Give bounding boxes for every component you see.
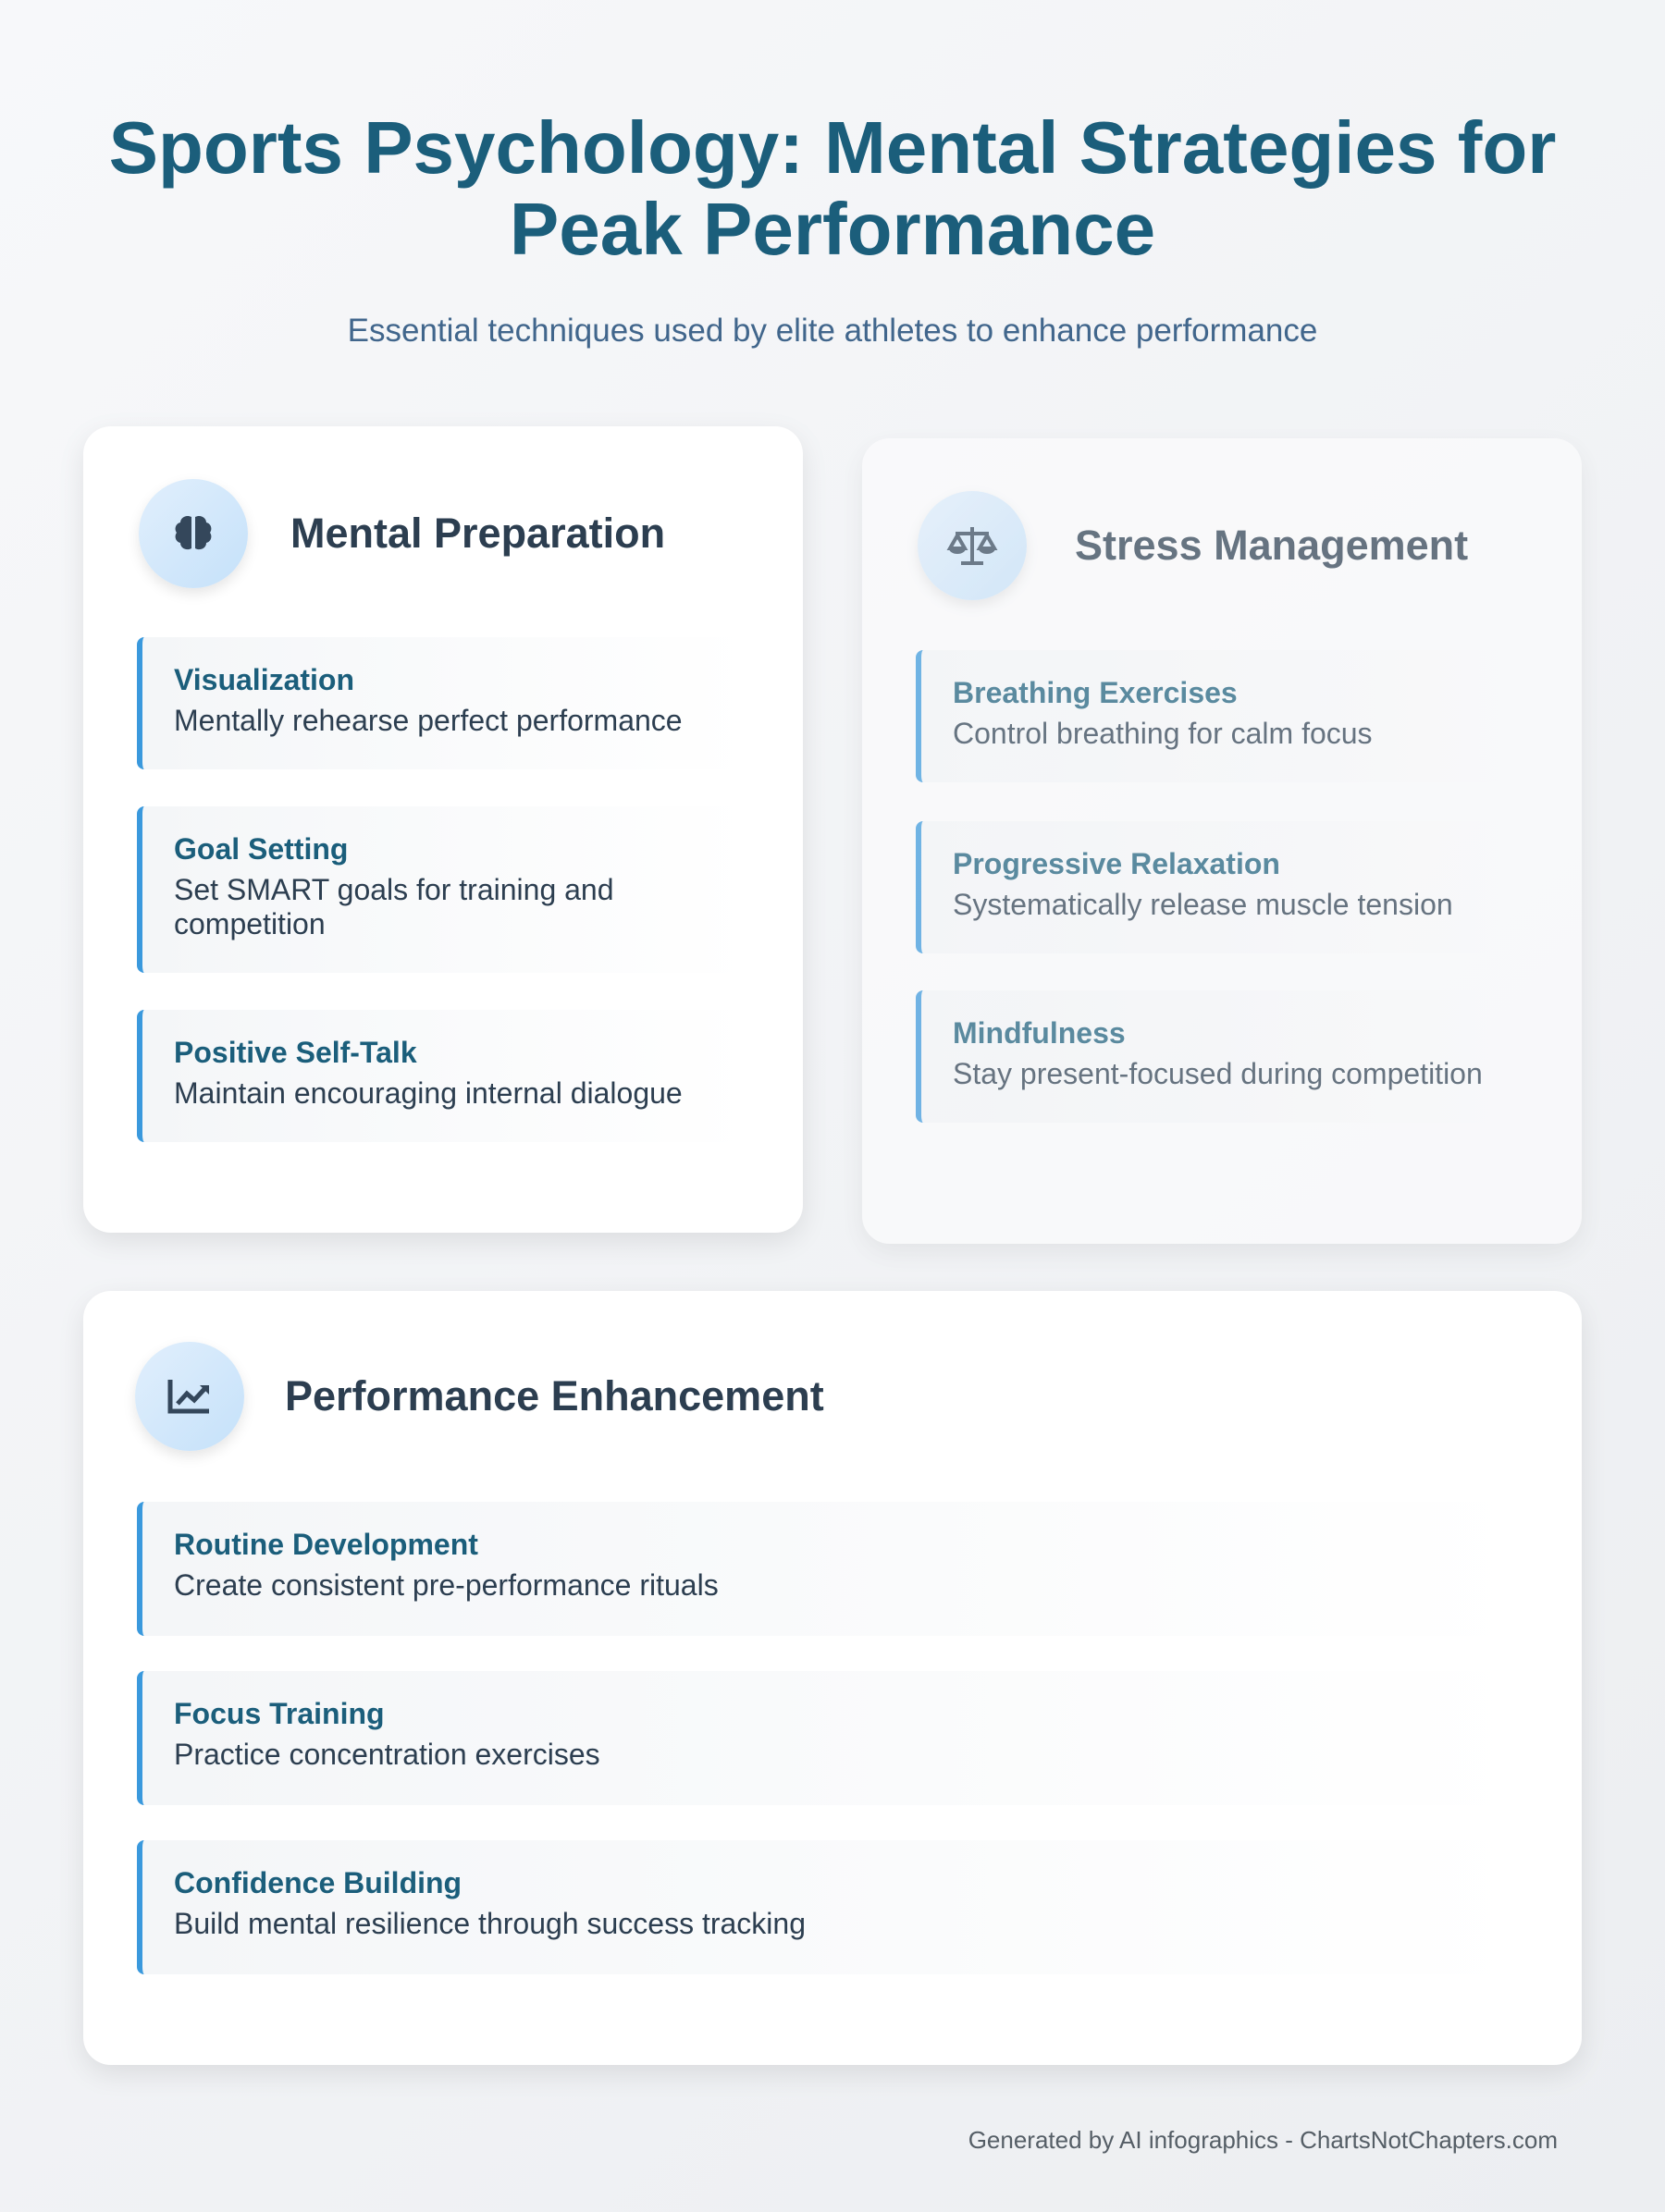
item: breathing [916, 650, 1526, 782]
item: self-talk [137, 1010, 747, 1142]
panel: performance enhancement [83, 1291, 1582, 2065]
item: mindfulness: Mindfulness [953, 1016, 1126, 1050]
item: breathing: Breathing Exercises [953, 676, 1238, 709]
footer: Generated by AI infographics - ChartsNotChapters.com [968, 2126, 1558, 2154]
item: goal setting: competition [174, 907, 326, 940]
item: routine: Create consistent pre-performance rituals [174, 1568, 719, 1602]
icon: chart [135, 1342, 244, 1451]
item: confidence: Confidence Building [174, 1866, 462, 1899]
heading: Stress Management [1075, 522, 1468, 569]
heading: Performance Enhancement [285, 1372, 824, 1419]
title [109, 106, 1556, 270]
item: self-talk: Maintain encouraging internal dialogue [174, 1076, 683, 1110]
item: visualization [137, 637, 747, 769]
item: relaxation: Systematically release muscle tension [953, 888, 1453, 921]
item: goal setting [137, 806, 747, 973]
item: goal setting: Set SMART goals for training and [174, 873, 614, 906]
icon: brain [139, 479, 248, 588]
icon: scale [918, 491, 1027, 600]
panel: mental preparation [83, 426, 803, 1233]
subtitle: Essential techniques used by elite athletes to enhance performance [348, 313, 1317, 349]
heading: Mental Preparation [290, 510, 665, 557]
item: relaxation: Progressive Relaxation [953, 847, 1280, 880]
item: focus: Practice concentration exercises [174, 1738, 600, 1771]
item: confidence [137, 1840, 1526, 1974]
panel: stress management [862, 438, 1582, 1244]
item: focus: Focus Training [174, 1697, 385, 1730]
item: visualization: Visualization [174, 663, 354, 696]
item: confidence: Build mental resilience through success tracking [174, 1907, 806, 1940]
item: visualization: Mentally rehearse perfect performance [174, 704, 683, 737]
item: mindfulness: Stay present-focused during competition [953, 1057, 1483, 1090]
item: mindfulness [916, 990, 1526, 1123]
item: goal setting: Goal Setting [174, 832, 348, 866]
item: relaxation [916, 821, 1526, 953]
item: self-talk: Positive Self-Talk [174, 1036, 417, 1069]
item: breathing: Control breathing for calm focus [953, 717, 1373, 750]
item: routine [137, 1502, 1526, 1636]
item: routine: Routine Development [174, 1528, 478, 1561]
title: Sports Psychology: Mental Strategies for [109, 106, 1556, 189]
title: Peak Performance [510, 188, 1155, 270]
item: focus [137, 1671, 1526, 1805]
